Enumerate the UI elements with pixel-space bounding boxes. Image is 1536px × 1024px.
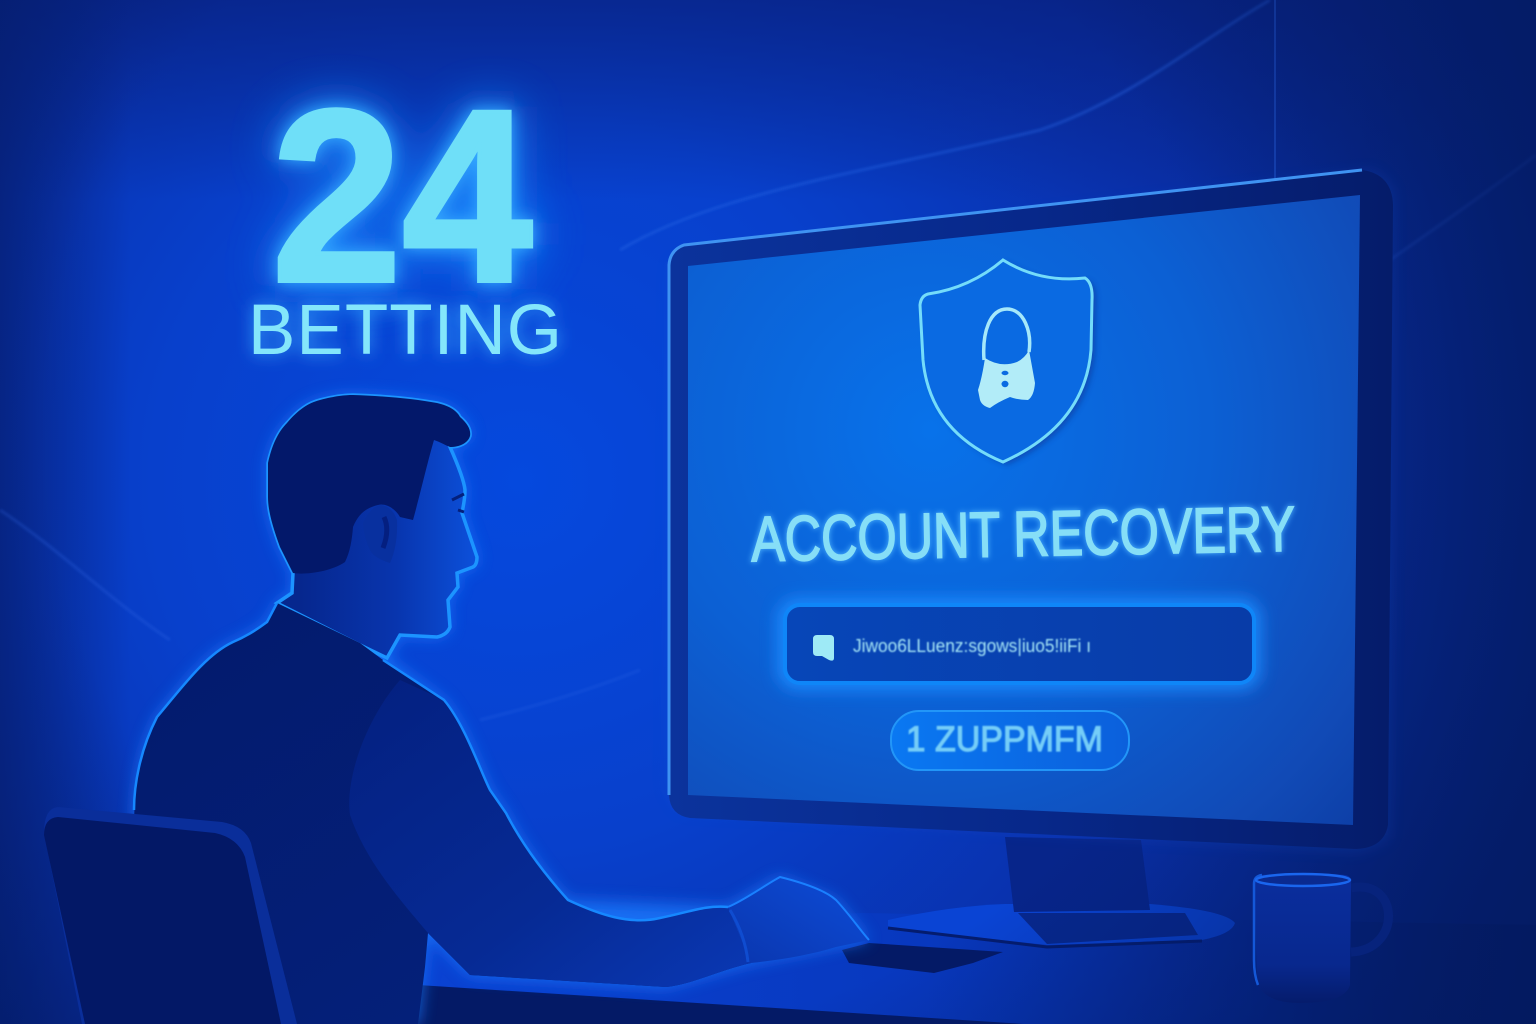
phone on desk: [842, 943, 1003, 973]
padlock icon: [978, 309, 1035, 408]
logo word: BETTING: [248, 291, 562, 370]
hair: [268, 395, 470, 574]
monitor screen: [688, 195, 1360, 825]
shield icon: [920, 260, 1096, 465]
logo glow: 24: [272, 59, 532, 334]
monitor bezel: [669, 170, 1393, 849]
body: [134, 603, 751, 1024]
logo: 24 Betting: [248, 59, 562, 370]
ear: [363, 505, 397, 563]
heading: account recovery: ACCOUNT RECOVERY: [750, 493, 1296, 575]
cuff: [730, 910, 748, 962]
input text: Jiwoo6LLuenz:sgows|iuo5!iiFi ı: [853, 636, 1091, 656]
hand: [728, 877, 869, 963]
office chair: [44, 807, 297, 1024]
button text: 1: [906, 720, 925, 759]
input field: [777, 598, 1261, 690]
eye shadow: [452, 494, 464, 512]
monitor stand: [888, 837, 1235, 947]
rim light: shoulder and arm: [134, 603, 728, 920]
logo word glow: BETTING: [248, 291, 562, 370]
button text: ZUPPMFM: [935, 720, 1103, 759]
desk: [418, 913, 1536, 1024]
person: [134, 395, 869, 1024]
heading: account recovery: ACCOUNT RECOVERY: [750, 493, 1296, 575]
logo number 24: 24: [272, 59, 532, 334]
person glow: [134, 395, 869, 1024]
chat icon: [813, 635, 834, 661]
monitor glow: [668, 172, 1392, 850]
button: [891, 711, 1129, 770]
head: [268, 395, 477, 658]
monitor: [668, 170, 1393, 850]
sleeve: [349, 680, 751, 987]
coffee mug: [1254, 873, 1389, 1003]
logo number 24 glow ring: 24: [272, 59, 532, 334]
